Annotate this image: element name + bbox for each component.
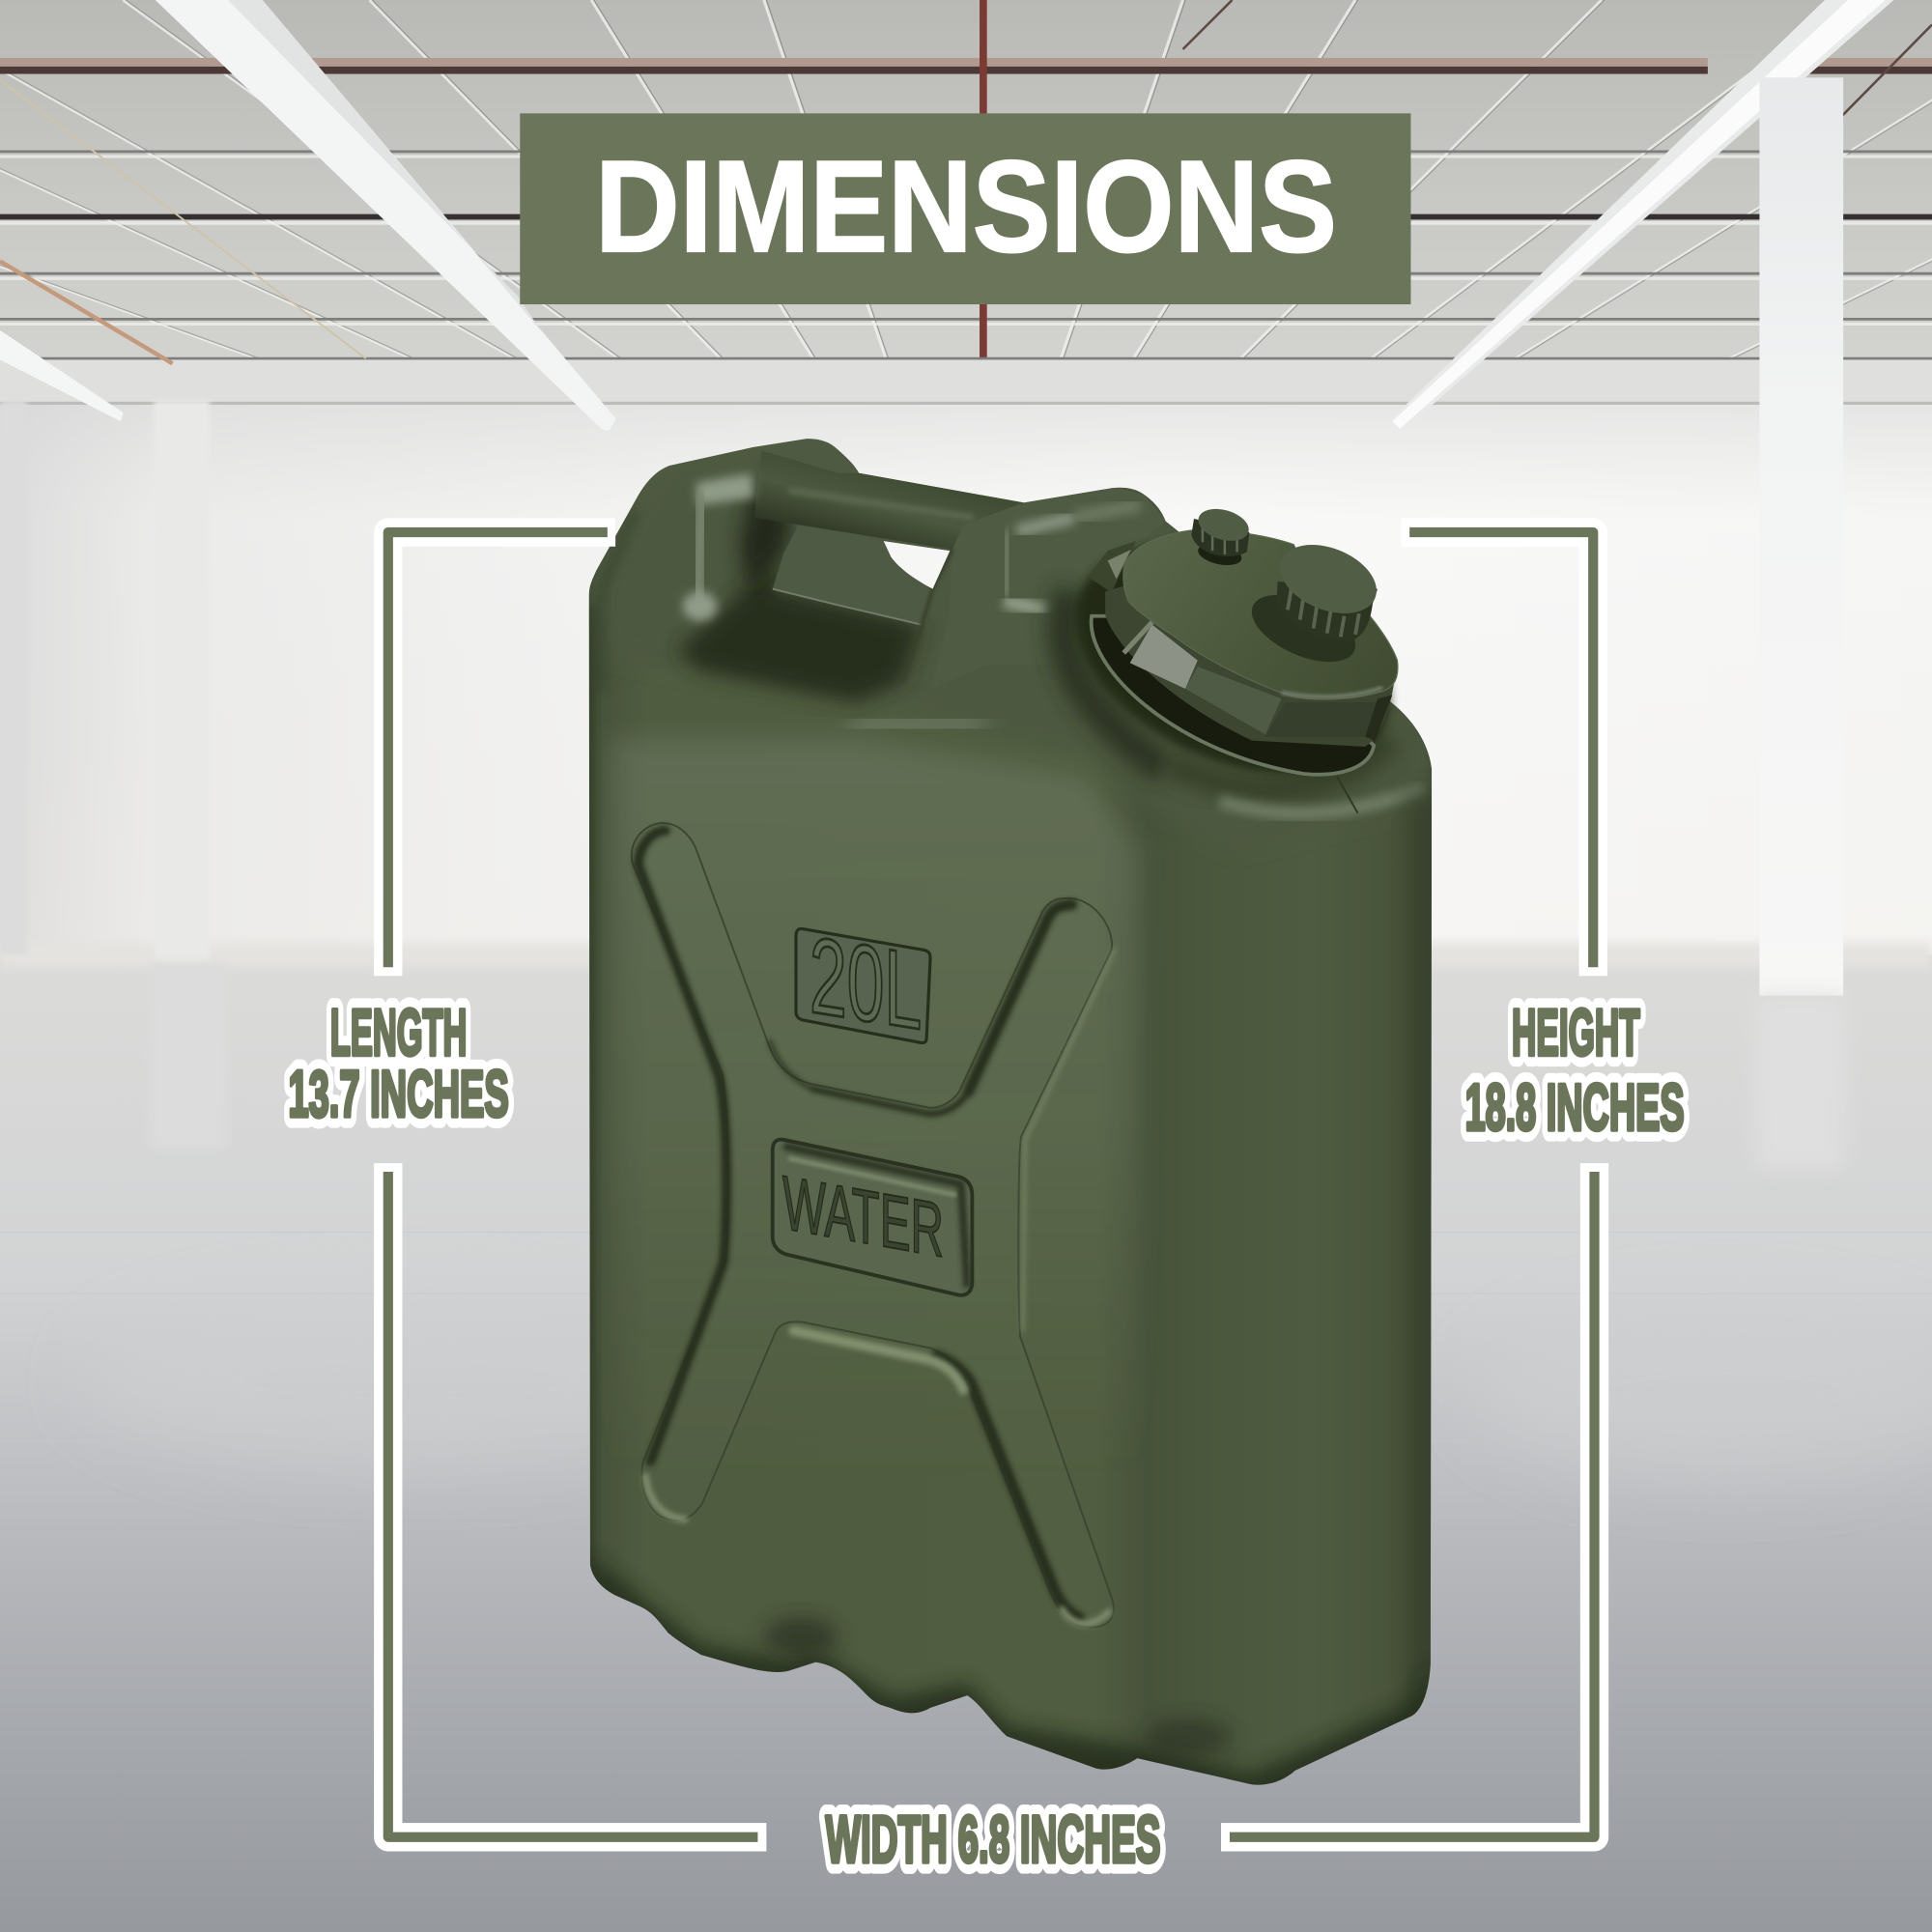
handle bar <box>754 451 1024 550</box>
20L badge: 20L <box>810 914 922 1052</box>
label: length: 13.7 INCHES <box>288 1059 509 1131</box>
right and left shading <box>1399 784 1432 1716</box>
ceiling grid <box>0 0 1932 358</box>
label: height <box>1465 997 1685 1145</box>
cap clip <box>1088 541 1136 593</box>
floor reflections <box>151 963 227 1149</box>
dark recess below handle <box>676 522 922 702</box>
20L badge <box>796 914 930 1052</box>
large knob <box>1242 531 1386 675</box>
embossed X panel <box>632 823 1115 1627</box>
right post <box>952 488 1153 549</box>
label: width: WIDTH 6.8 INCHES <box>826 1802 1161 1876</box>
title banner: DIMENSIONS <box>595 133 1337 279</box>
label: height: HEIGHT <box>1512 997 1640 1069</box>
label: length: LENGTH <box>330 997 467 1069</box>
X groove shadows <box>639 831 1079 1618</box>
left post highlights <box>668 487 700 610</box>
top shoulder <box>589 439 1432 786</box>
label: length <box>288 997 509 1131</box>
WATER badge: WATER <box>782 1159 944 1273</box>
WATER badge <box>773 1140 972 1295</box>
lid top <box>1123 529 1398 699</box>
dimension bracket: length <box>388 532 757 1837</box>
label: width: WIDTH 6.8 INCHES <box>826 1802 1161 1876</box>
X groove highlights <box>645 949 1115 1624</box>
ceiling light tubes <box>0 0 1893 431</box>
cap panels <box>1130 625 1198 689</box>
label: width <box>826 1802 1161 1876</box>
small knob <box>1191 503 1253 569</box>
shoulder light and socket shadow <box>850 721 985 727</box>
title banner <box>520 113 1410 304</box>
water jerrycan <box>579 431 1441 1811</box>
label: height: 18.8 INCHES <box>1465 1072 1685 1145</box>
rust beams <box>0 0 1932 363</box>
label: length: LENGTH <box>330 997 467 1069</box>
columns <box>1759 77 1843 996</box>
cap <box>1039 499 1425 819</box>
label: height: 18.8 INCHES <box>1465 1072 1685 1145</box>
label: height: HEIGHT <box>1512 997 1640 1069</box>
handle inner wall <box>773 525 933 625</box>
bottom shading <box>590 1555 1430 1785</box>
dimension bracket: height <box>1230 532 1595 1837</box>
label: length: 13.7 INCHES <box>288 1059 509 1131</box>
